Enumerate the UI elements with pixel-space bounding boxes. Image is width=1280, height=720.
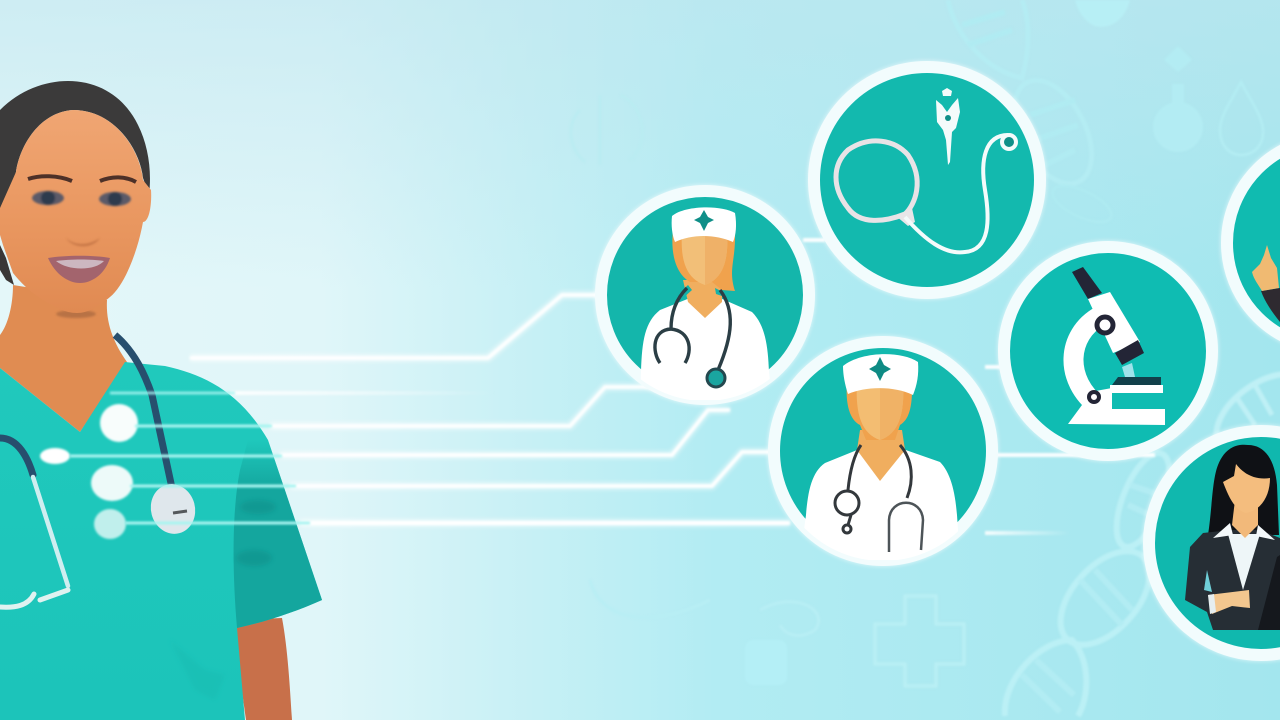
circle: stethoscope <box>808 61 1046 299</box>
eyepiece <box>1072 267 1102 299</box>
bag <box>1258 555 1280 630</box>
stethoscope loop <box>836 141 917 220</box>
watermark: faint shapes bottom <box>590 580 819 685</box>
light lines over shirt <box>70 393 310 523</box>
stethoscope tube <box>115 335 172 488</box>
cap <box>672 207 736 242</box>
neck <box>683 280 722 318</box>
hair <box>846 389 912 440</box>
face right half <box>705 232 727 285</box>
chest piece <box>707 369 725 387</box>
stage <box>1110 377 1163 393</box>
ear shadow left <box>0 245 14 285</box>
cap <box>843 354 918 395</box>
right fading connector <box>985 531 1070 535</box>
tube <box>1088 292 1140 353</box>
watermark: DNA top <box>948 0 1116 229</box>
hair <box>1208 445 1279 535</box>
face <box>857 382 903 440</box>
ring <box>768 336 998 566</box>
watermark: flask <box>1153 46 1203 152</box>
eyes <box>32 191 131 206</box>
cap star <box>869 357 891 381</box>
ear piece <box>1002 135 1016 149</box>
collar <box>1213 523 1275 540</box>
stethoscope left tube <box>0 438 68 607</box>
sleeve dark patches <box>236 500 276 566</box>
face <box>1223 464 1270 508</box>
watermark: faint shape top <box>1075 0 1130 27</box>
neck and chest <box>0 285 127 432</box>
watermark: DNA bottom <box>1005 446 1180 716</box>
ring <box>1143 425 1280 661</box>
base <box>1068 388 1165 425</box>
stethoscope tube <box>905 135 1008 252</box>
right side connectors <box>803 240 1155 455</box>
brows <box>28 176 136 182</box>
neck <box>857 430 905 481</box>
body <box>800 448 960 560</box>
watermark: medical icons and DNA <box>571 0 1280 716</box>
sleeve shading <box>234 440 322 628</box>
arm <box>1208 590 1250 614</box>
line 5 <box>290 452 780 486</box>
objective <box>1115 340 1144 365</box>
face <box>682 232 727 285</box>
glowing dots <box>40 404 138 539</box>
circle: microscope <box>998 241 1218 461</box>
light beam <box>1122 363 1135 377</box>
circle: nurse with stethoscope <box>595 185 815 405</box>
watermark: drop <box>1220 82 1263 155</box>
body <box>640 298 772 400</box>
cap star <box>694 210 714 231</box>
face <box>0 110 151 313</box>
stethoscope chest piece <box>145 479 201 539</box>
neck shadow <box>56 310 96 318</box>
face right half <box>880 388 903 440</box>
nose <box>66 238 100 246</box>
stem <box>896 208 915 226</box>
connector lines <box>190 240 1155 535</box>
neck <box>1232 504 1258 538</box>
collar tabs <box>684 285 722 296</box>
arm <box>1073 316 1100 406</box>
line 3 <box>270 387 690 426</box>
line 6 <box>300 520 790 526</box>
ring <box>595 185 815 405</box>
circle: partially cropped with raised hand <box>1221 132 1280 354</box>
nurse photo figure <box>0 81 322 720</box>
knob lower <box>1089 392 1099 402</box>
arm <box>232 618 292 720</box>
stethoscope <box>835 445 923 552</box>
line 2 fading <box>230 391 495 395</box>
ring <box>1221 132 1280 354</box>
ring <box>998 241 1218 461</box>
line 4 <box>280 410 730 455</box>
watermark: cross <box>875 596 964 686</box>
caduceus pin <box>936 88 960 165</box>
ring <box>808 61 1046 299</box>
shirt <box>1228 534 1260 590</box>
stethoscope <box>655 288 730 370</box>
shirt fold <box>170 640 225 700</box>
knob upper <box>1097 317 1113 333</box>
circle: nurse with stethoscope 2 <box>768 336 998 566</box>
gap in arm <box>1204 570 1212 592</box>
hair <box>0 81 150 212</box>
jacket <box>1185 530 1280 630</box>
mouth <box>48 256 110 283</box>
hair <box>672 230 735 291</box>
line 1 to nurse circle <box>190 295 605 358</box>
cuff <box>1208 594 1216 614</box>
watermark: faint organ shape <box>571 95 642 165</box>
scrub shirt <box>0 362 322 720</box>
circle: businesswoman <box>1143 425 1280 661</box>
hand <box>1252 245 1279 291</box>
watermark: DNA behind circles <box>1202 357 1280 473</box>
sleeve <box>1261 288 1280 322</box>
